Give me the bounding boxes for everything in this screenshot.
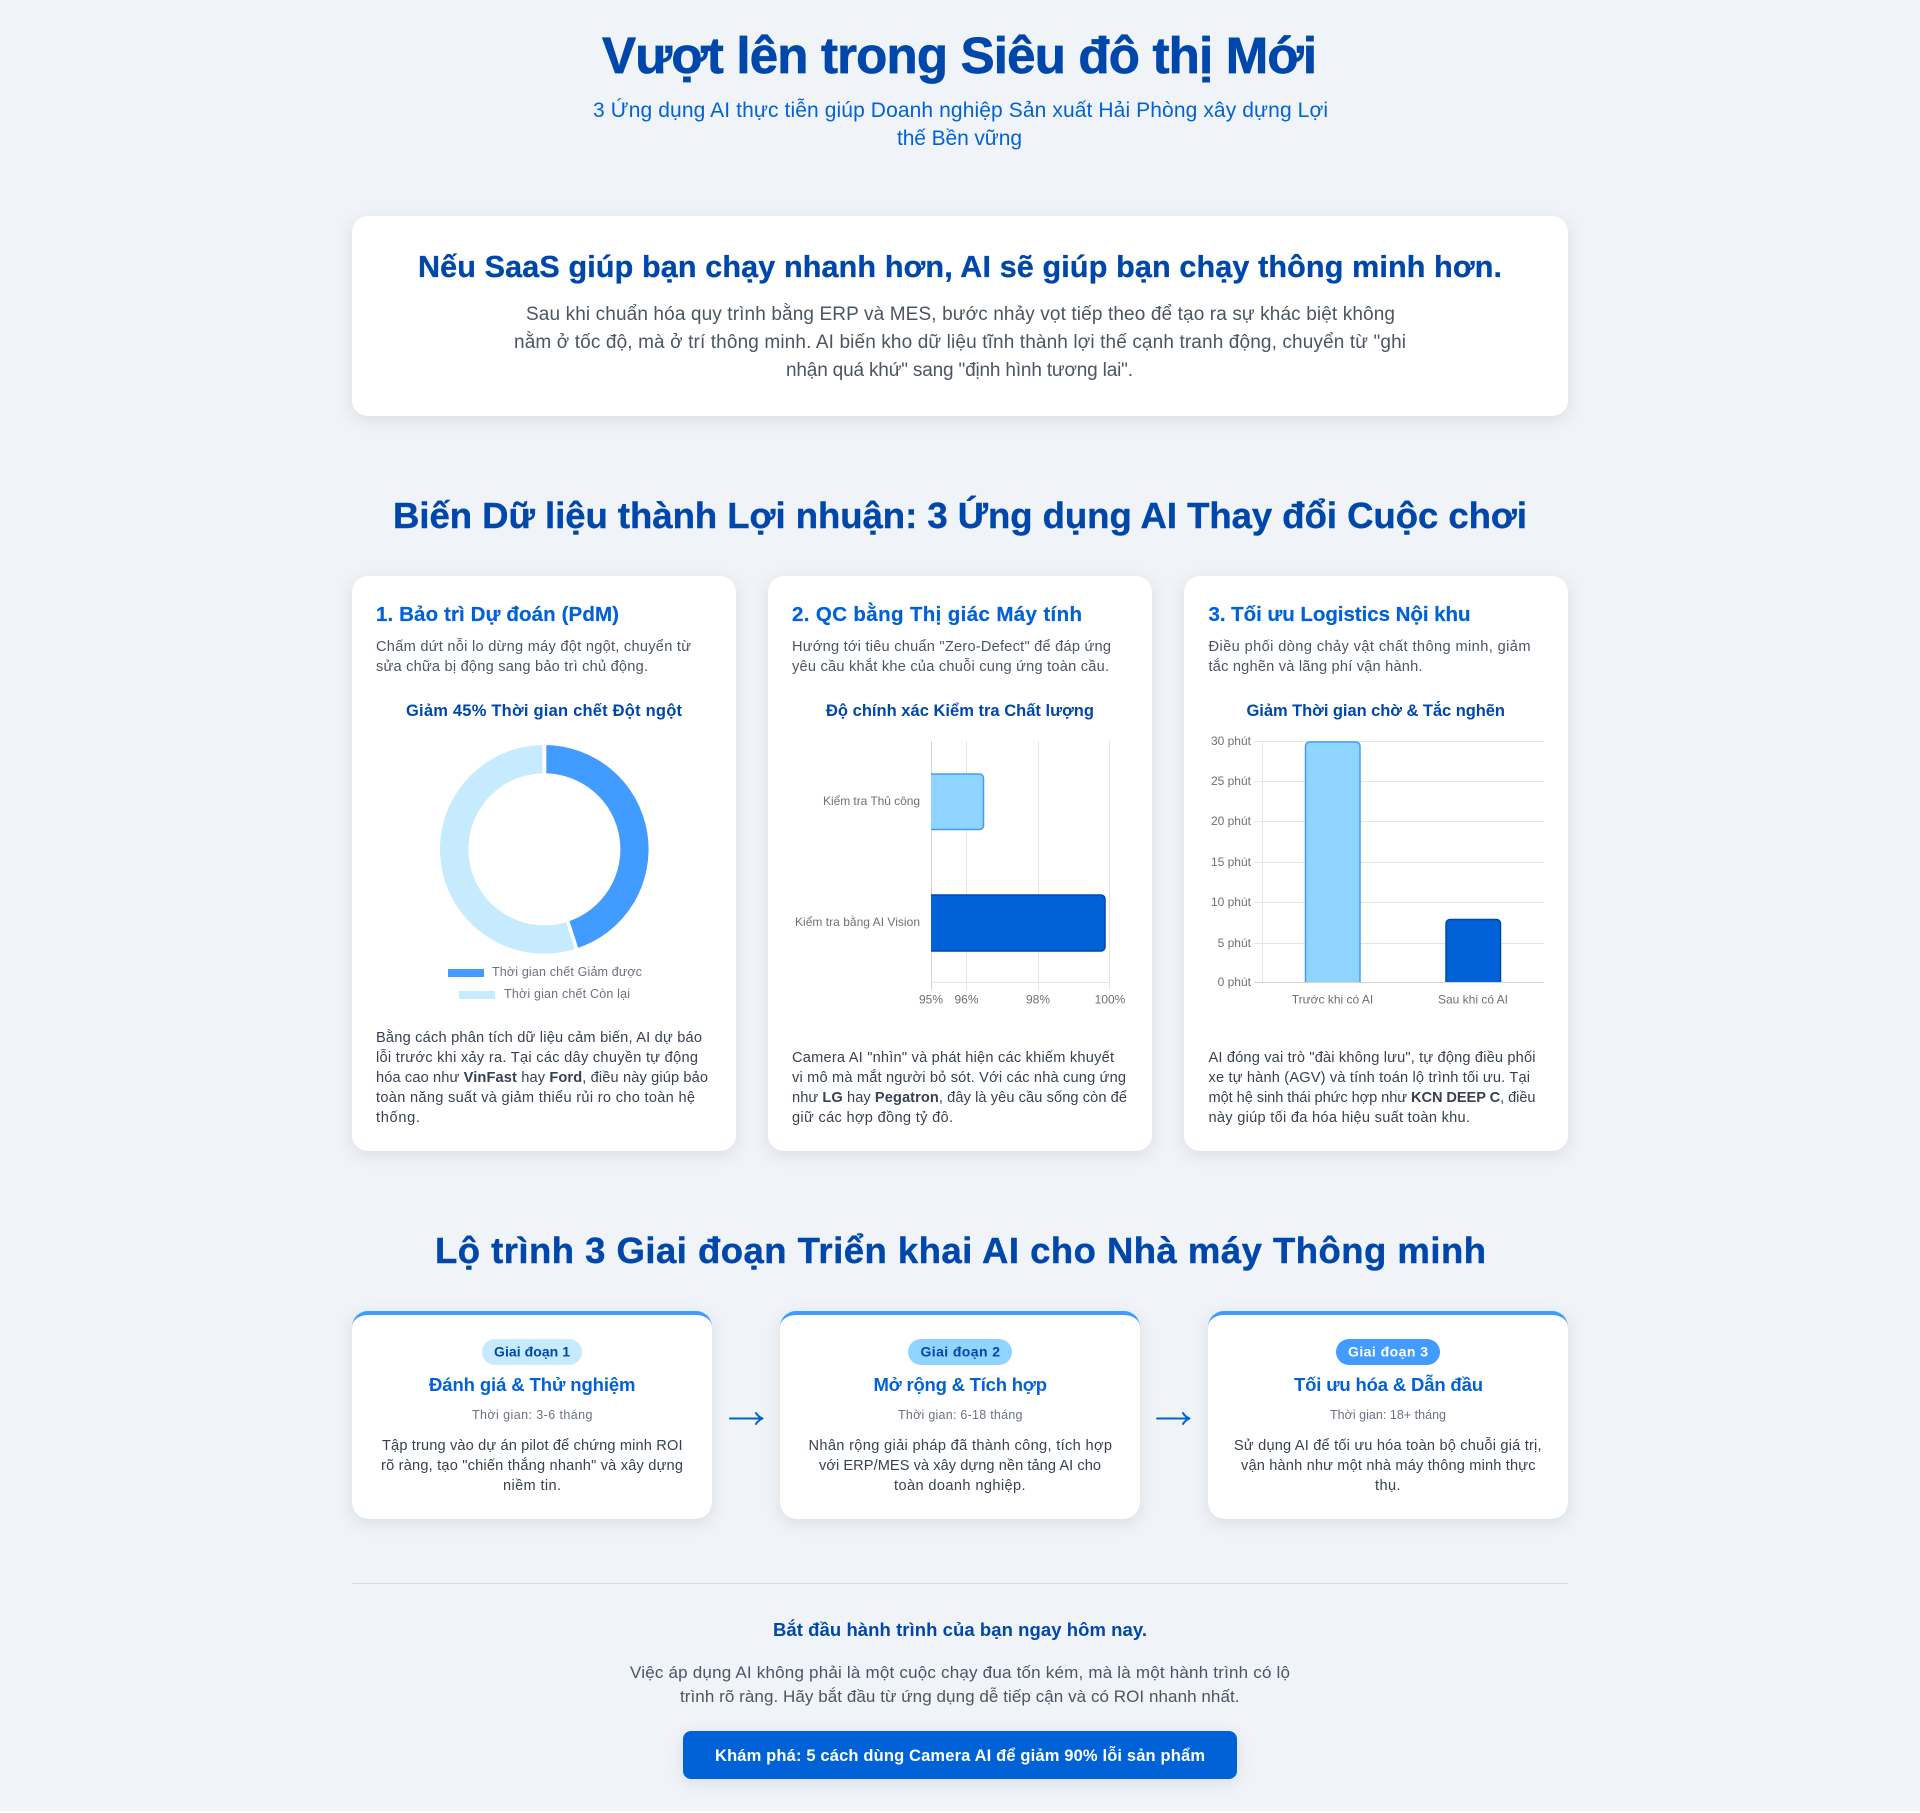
card description: yêu cầu khắt khe của chuỗi cung ứng toàn cầu. <box>792 658 1109 675</box>
CTA paragraph <box>630 1663 1290 1706</box>
card description: Hướng tới tiêu chuẩn "Zero-Defect" để đáp ứng <box>792 639 1111 655</box>
axis labels: Kiểm tra bằng AI Vision <box>795 914 920 929</box>
vertical bar chart <box>1211 734 1544 1006</box>
axis labels: 10 phút <box>1211 895 1252 909</box>
panel: computer vision QC <box>768 576 1152 1151</box>
card body text: giữ các hợp đồng tỷ đô. <box>792 1110 953 1126</box>
donut legend: Thời gian chết Còn lại <box>504 987 630 1001</box>
card body text: một hệ sinh thái phức hợp như KCN DEEP C, điều <box>1208 1090 1536 1106</box>
axis labels: 95% <box>919 992 943 1006</box>
axis labels: 5 phút <box>1218 936 1252 950</box>
subtitle: 3 Ứng dụng AI thực tiễn giúp Doanh nghiệp Sản xuất Hải Phòng xây dựng Lợi <box>593 99 1328 122</box>
stage badge <box>1336 1339 1440 1365</box>
bar: before AI <box>1306 742 1360 982</box>
stage description: toàn doanh nghiệp. <box>894 1478 1026 1494</box>
chart title: Độ chính xác Kiểm tra Chất lượng <box>826 702 1094 720</box>
CTA button: Khám phá: 5 cách dùng Camera AI để giảm 90% lỗi sản phẩm <box>715 1746 1205 1765</box>
donut chart <box>440 743 649 954</box>
stage description: thụ. <box>1375 1478 1400 1494</box>
card body text: như LG hay Pegatron, đây là yêu cầu sống còn để <box>792 1090 1127 1106</box>
section heading: roadmap: Lộ trình 3 Giai đoạn Triển khai AI cho Nhà máy Thông minh <box>435 1230 1486 1271</box>
intro paragraph: nằm ở tốc độ, mà ở trí thông minh. AI biến kho dữ liệu tĩnh thành lợi thế cạnh tranh động, chuyển từ "ghi <box>514 331 1406 353</box>
card body text: xe tự hành (AGV) và tính toán lộ trình tối ưu. Tại <box>1208 1070 1530 1086</box>
card body text: Camera AI "nhìn" và phát hiện các khiếm khuyết <box>792 1050 1114 1066</box>
subtitle <box>593 99 1328 150</box>
horizontal bar chart <box>795 741 1126 1006</box>
stage title: Tối ưu hóa & Dẫn đầu <box>1294 1374 1483 1395</box>
stage description <box>381 1438 683 1494</box>
category labels: Trước khi có AI <box>1292 992 1373 1006</box>
panel: intro statement <box>352 216 1568 416</box>
stage description <box>808 1438 1112 1494</box>
card description: Chấm dứt nỗi lo dừng máy đột ngột, chuyển từ <box>376 638 691 655</box>
axis labels <box>1211 734 1252 989</box>
stage badge: Giai đoạn 2 <box>920 1344 1000 1360</box>
chart title: Giảm Thời gian chờ & Tắc nghẽn <box>1246 701 1505 720</box>
card heading: 2. QC bằng Thị giác Máy tính <box>792 602 1082 626</box>
stage description: Nhân rộng giải pháp đã thành công, tích hợp <box>808 1438 1112 1454</box>
axis labels: Kiểm tra Thủ công <box>823 794 920 808</box>
stage description: rõ ràng, tạo "chiến thắng nhanh" và xây dựng <box>381 1457 683 1474</box>
stage title: Đánh giá & Thử nghiệm <box>429 1374 636 1395</box>
intro paragraph <box>514 303 1406 381</box>
panel: stage 1 <box>352 1311 712 1519</box>
card body text: toàn năng suất và giảm thiểu rủi ro cho toàn hệ <box>376 1090 695 1106</box>
subtitle: thế Bền vững <box>897 127 1022 150</box>
axis labels <box>795 794 1126 1006</box>
call to action <box>630 1619 1290 1779</box>
arrow: stage 2 to 3 <box>1157 1413 1190 1424</box>
card body text <box>376 1029 708 1126</box>
stage title: Mở rộng & Tích hợp <box>874 1374 1047 1395</box>
stage badge <box>482 1339 582 1365</box>
card description: tắc nghẽn và lãng phí vận hành. <box>1208 658 1422 675</box>
intro heading: Nếu SaaS giúp bạn chạy nhanh hơn, AI sẽ giúp bạn chạy thông minh hơn. <box>418 250 1502 284</box>
donut legend <box>448 965 642 1001</box>
stage duration: Thời gian: 3-6 tháng <box>472 1408 593 1422</box>
axis labels: 20 phút <box>1211 814 1252 828</box>
axis labels: 25 phút <box>1211 774 1252 788</box>
card body text <box>792 1050 1127 1126</box>
card body text: hóa cao như VinFast hay Ford, điều này giúp bảo <box>376 1070 708 1086</box>
axis labels: 96% <box>954 992 979 1006</box>
stage badge: Giai đoạn 1 <box>494 1344 570 1360</box>
stage duration: Thời gian: 6-18 tháng <box>898 1408 1023 1422</box>
card description <box>792 639 1111 675</box>
stage description: với ERP/MES và xây dựng nền tảng AI cho <box>819 1458 1101 1474</box>
stage description <box>1234 1437 1542 1494</box>
intro paragraph: Sau khi chuẩn hóa quy trình bằng ERP và MES, bước nhảy vọt tiếp theo để tạo ra sự khác biệt không <box>526 303 1395 325</box>
bar: manual inspection <box>931 774 984 830</box>
stage description: niềm tin. <box>503 1478 561 1494</box>
card body text: thống. <box>376 1110 420 1126</box>
card description: Điều phối dòng chảy vật chất thông minh, giảm <box>1208 639 1530 655</box>
panel: stage 3 <box>1208 1311 1568 1519</box>
category labels: Sau khi có AI <box>1438 992 1508 1006</box>
CTA paragraph: Việc áp dụng AI không phải là một cuộc chạy đua tốn kém, mà là một hành trình có lộ <box>630 1663 1290 1682</box>
stage description: Sử dụng AI để tối ưu hóa toàn bộ chuỗi giá trị, <box>1234 1437 1542 1454</box>
axis labels: 100% <box>1095 992 1126 1006</box>
header <box>593 27 1328 150</box>
category labels <box>1292 992 1508 1006</box>
axis labels: 15 phút <box>1211 855 1252 869</box>
stage badge <box>908 1339 1012 1365</box>
stage badge: Giai đoạn 3 <box>1348 1344 1428 1360</box>
panel: predictive maintenance <box>352 576 736 1151</box>
donut legend: Thời gian chết Giảm được <box>492 965 642 979</box>
card body text: lỗi trước khi xảy ra. Tại các dây chuyền tự động <box>376 1049 698 1066</box>
stage description: Tập trung vào dự án pilot để chứng minh ROI <box>382 1438 682 1454</box>
bar: AI vision inspection <box>931 895 1105 951</box>
panel: logistics optimisation <box>1184 576 1568 1151</box>
CTA paragraph: trình rõ ràng. Hãy bắt đầu từ ứng dụng dễ tiếp cận và có ROI nhanh nhất. <box>680 1687 1240 1706</box>
axis labels: 0 phút <box>1218 975 1252 989</box>
card body text: AI đóng vai trò "đài không lưu", tự động điều phối <box>1208 1050 1536 1066</box>
axis labels: 30 phút <box>1211 734 1252 748</box>
axis labels: 98% <box>1026 992 1050 1006</box>
stage duration: Thời gian: 18+ tháng <box>1330 1408 1446 1422</box>
card description <box>376 638 691 675</box>
CTA heading: Bắt đầu hành trình của bạn ngay hôm nay. <box>773 1619 1147 1640</box>
card heading: 3. Tối ưu Logistics Nội khu <box>1208 603 1470 626</box>
panel: stage 2 <box>780 1311 1140 1519</box>
bar: after AI <box>1446 920 1500 982</box>
chart title: Giảm 45% Thời gian chết Đột ngột <box>406 702 682 720</box>
arrow: stage 1 to 2 <box>730 1413 762 1424</box>
card body text: này giúp tối đa hóa hiệu suất toàn khu. <box>1208 1110 1470 1126</box>
CTA button <box>683 1731 1237 1779</box>
section heading: applications: Biến Dữ liệu thành Lợi nhuận: 3 Ứng dụng AI Thay đổi Cuộc chơi <box>393 494 1527 536</box>
stage description: vận hành như một nhà máy thông minh thực <box>1241 1458 1536 1474</box>
card body text: Bằng cách phân tích dữ liệu cảm biến, AI dự báo <box>376 1029 702 1046</box>
card body text <box>1208 1050 1536 1126</box>
intro paragraph: nhận quá khứ" sang "định hình tương lai". <box>786 360 1133 381</box>
title: Vượt lên trong Siêu đô thị Mới <box>602 27 1317 84</box>
card description <box>1208 639 1530 675</box>
card heading: 1. Bảo trì Dự đoán (PdM) <box>376 603 619 626</box>
card body text: vi mô mà mắt người bỏ sót. Với các nhà cung ứng <box>792 1069 1126 1086</box>
card description: sửa chữa bị động sang bảo trì chủ động. <box>376 659 648 675</box>
